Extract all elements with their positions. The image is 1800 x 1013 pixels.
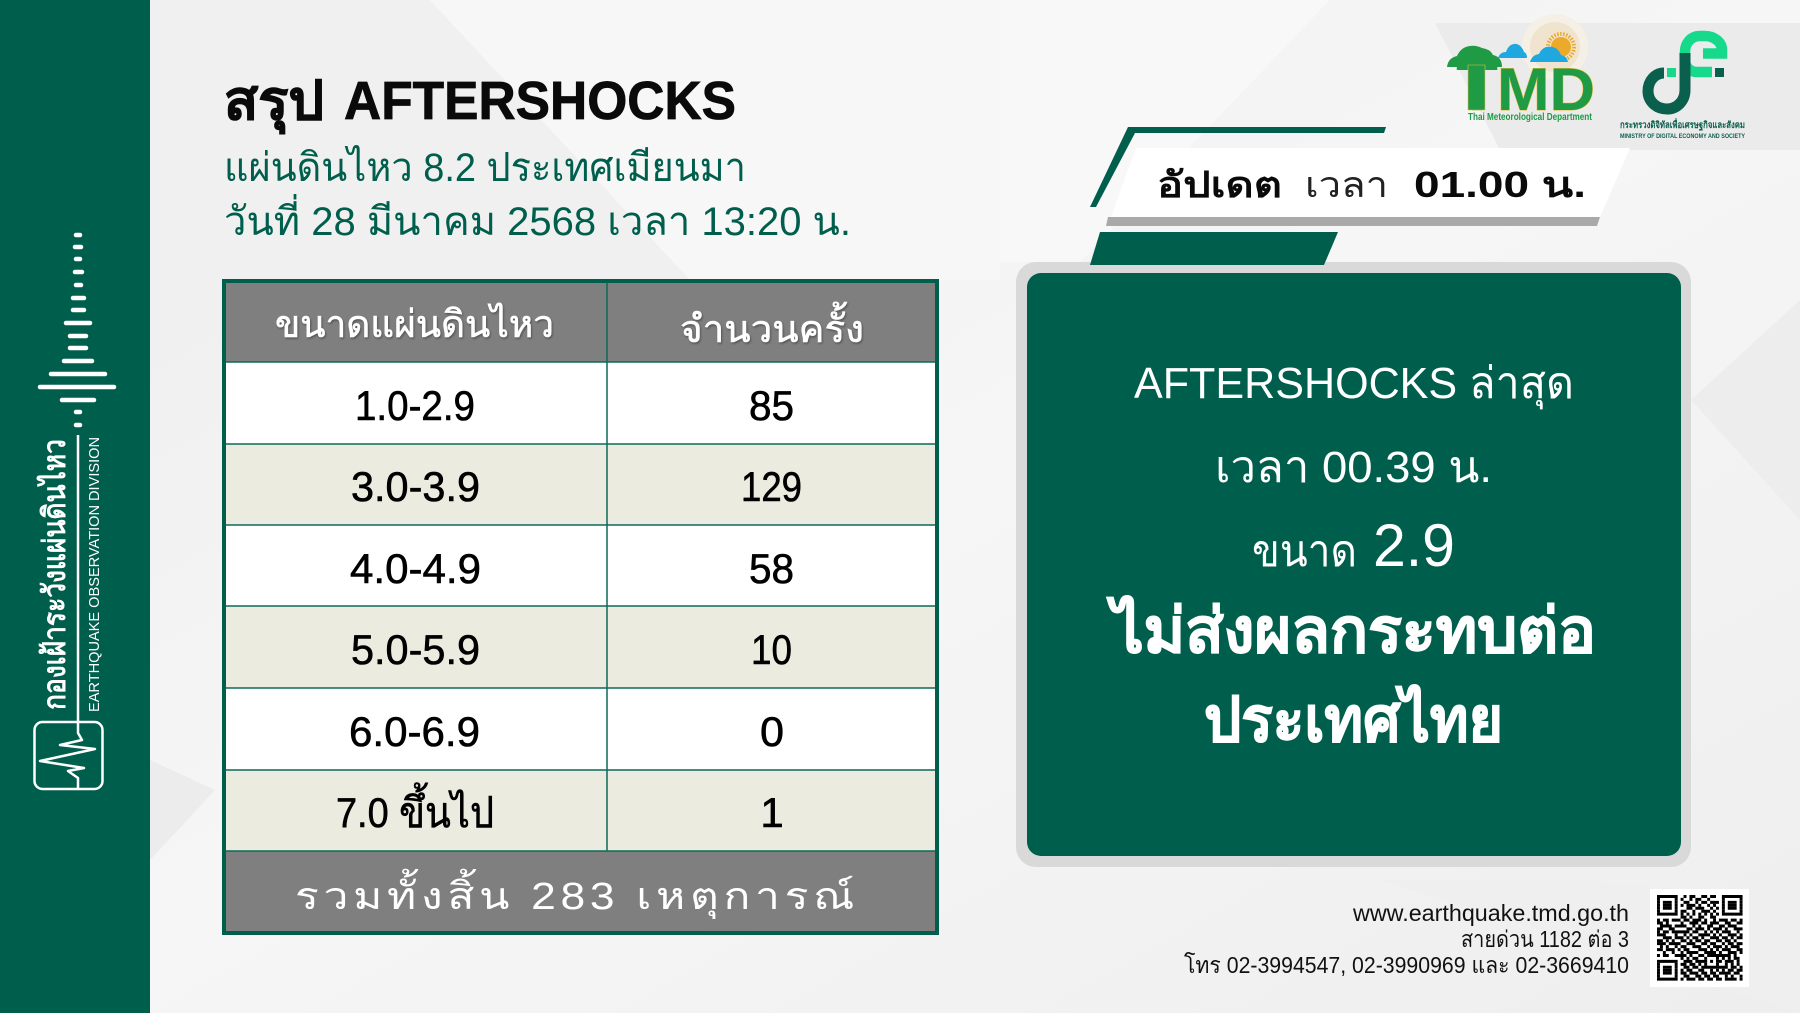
logo: TMD: Thai Meteorological Department <box>1468 111 1592 123</box>
title: สรุป <box>224 71 324 135</box>
row 1: 85 <box>749 382 794 429</box>
row 3 <box>350 545 794 592</box>
logo: TMD: MD <box>1497 56 1595 123</box>
panel statement line 2: ประเทศไทย <box>1204 684 1503 755</box>
subtitle: event: แผ่นดินไหว 8.2 ประเทศเมียนมา <box>224 145 746 190</box>
update word time: เวลา <box>1305 164 1388 205</box>
table header: count: จำนวนครั้ง <box>680 301 864 351</box>
panel line: latest: AFTERSHOCKS ล่าสุด <box>1134 359 1574 410</box>
logo: digital economy ministry: กระทรวงดิจิทัลเพื่อเศรษฐกิจและสังคม <box>1620 117 1745 131</box>
row 6: 7.0 ขึ้นไป <box>336 782 494 836</box>
logo: digital economy ministry <box>1620 36 1746 140</box>
title: AFTERSHOCKS <box>344 71 736 131</box>
division name english: EARTHQUAKE OBSERVATION DIVISION <box>86 437 103 712</box>
logo: TMD: T <box>1456 47 1498 125</box>
row 3: 58 <box>749 545 794 592</box>
panel line: time: เวลา 00.39 น. <box>1215 443 1492 492</box>
panel value: magnitude number: 2.9 <box>1373 512 1455 579</box>
division name thai: กองเฝ้าระวังแผ่นดินไหว <box>36 439 72 710</box>
panel: latest aftershock <box>1016 262 1691 867</box>
row 6 <box>336 782 784 836</box>
update time value: 01.00 น. <box>1414 164 1586 205</box>
logo: digital economy ministry: MINISTRY OF DIGITAL ECONOMY AND SOCIETY <box>1620 133 1746 140</box>
icon: seismograph box <box>34 435 102 789</box>
row 6: 1 <box>760 789 784 836</box>
update time banner <box>1090 127 1630 265</box>
table header: magnitude: ขนาดแผ่นดินไหว <box>275 303 554 346</box>
row 5: 6.0-6.9 <box>349 708 480 755</box>
panel statement line 1: ไม่ส่งผลกระทบต่อ <box>1106 595 1596 666</box>
row 1: 1.0-2.9 <box>355 382 475 429</box>
table footer: total: รวมทั้งสิ้น 283 เหตุการณ์ <box>295 868 859 919</box>
row 2: 129 <box>741 463 802 510</box>
row 2 <box>351 463 802 510</box>
contact: phones: โทร 02-3994547, 02-3990969 และ 02-3669410 <box>1184 952 1629 978</box>
subtitle: date: วันที่ 28 มีนาคม 2568 เวลา 13:20 น. <box>224 194 851 244</box>
update label: อัปเดต <box>1157 164 1282 205</box>
table: aftershock counts <box>224 281 937 933</box>
row 2: 3.0-3.9 <box>351 463 480 510</box>
row 3: 4.0-4.9 <box>350 545 481 592</box>
left sidebar <box>0 0 150 1013</box>
icon: division waveform <box>40 235 114 425</box>
row 5 <box>349 708 784 755</box>
logo: TMD <box>1447 14 1595 125</box>
row 5: 0 <box>760 708 784 755</box>
row 1 <box>355 382 794 429</box>
row 4: 10 <box>751 626 792 673</box>
title <box>224 71 736 135</box>
row 4: 5.0-5.9 <box>351 626 480 673</box>
contact: hotline: สายด่วน 1182 ต่อ 3 <box>1461 926 1629 952</box>
contact: website: www.earthquake.tmd.go.th <box>1352 900 1629 926</box>
panel line: magnitude: ขนาด <box>1252 527 1357 576</box>
QR code <box>1650 889 1749 987</box>
row 4 <box>351 626 792 673</box>
